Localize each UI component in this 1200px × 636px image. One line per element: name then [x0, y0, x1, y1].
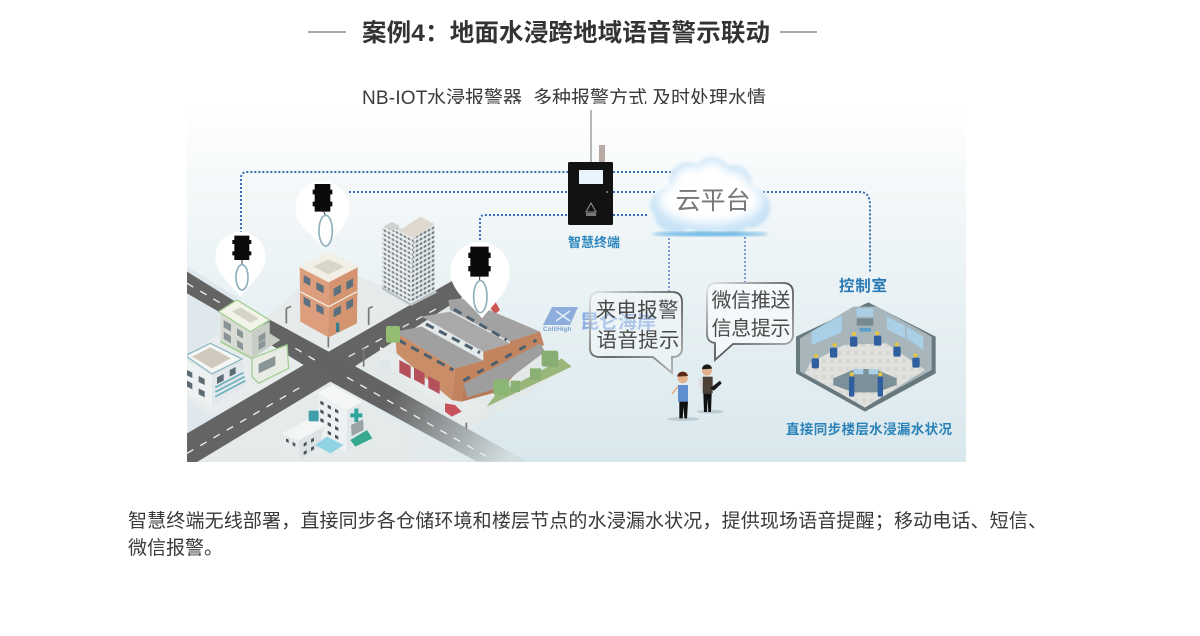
control room illustration	[796, 302, 936, 412]
subtitle: 多种报警方式	[533, 87, 647, 109]
map pin: sensor two	[295, 181, 349, 248]
speech bubble: WeChat push	[707, 283, 793, 360]
dotted connection lines	[241, 172, 870, 291]
subtitle: NB-IOT	[362, 88, 428, 109]
title: 案例4：地面水浸跨地域语音警示联动	[362, 19, 770, 47]
cloud platform: 云平台	[676, 187, 750, 215]
speech bubble: call alert: 语音提示	[596, 329, 680, 352]
label: control room: 控制室	[839, 276, 887, 295]
subtitle: 水浸报警器	[427, 87, 522, 109]
hospital building	[282, 385, 372, 460]
watermark logo: 昆仑海岸	[580, 310, 656, 333]
diagram panel: smart city water alarm network	[185, 104, 966, 470]
speech bubble: WeChat push: 信息提示	[712, 317, 790, 340]
label: smart terminal: 智慧终端	[568, 235, 620, 250]
description paragraph: 微信报警。	[128, 537, 223, 559]
subtitle: 及时处理水情	[652, 87, 766, 109]
map pin: sensor three	[450, 242, 510, 318]
watermark logo	[543, 307, 656, 333]
caption: control room sync: 直接同步楼层水浸漏水状况	[786, 421, 952, 437]
factory building	[380, 295, 572, 425]
speech bubble: call alert	[590, 292, 682, 373]
green trimmed house	[219, 300, 289, 383]
city street map	[187, 263, 570, 470]
watermark logo: ColliHigh	[543, 326, 572, 333]
description paragraph: 智慧终端无线部署，直接同步各仓储环境和楼层节点的水浸漏水状况，提供现场语音提醒；移动电话、短信、	[128, 510, 1047, 532]
description paragraph	[128, 510, 1047, 559]
brick apartment building	[300, 252, 358, 337]
map pin: sensor one	[215, 232, 265, 297]
high-rise tower	[382, 217, 437, 306]
people: two staff with devices	[667, 364, 723, 421]
white office building	[187, 342, 246, 398]
speech bubble: WeChat push: 微信推送	[712, 289, 790, 312]
smart terminal device	[568, 110, 613, 225]
speech bubble: call alert: 来电报警	[596, 299, 678, 322]
cloud platform	[650, 157, 770, 236]
